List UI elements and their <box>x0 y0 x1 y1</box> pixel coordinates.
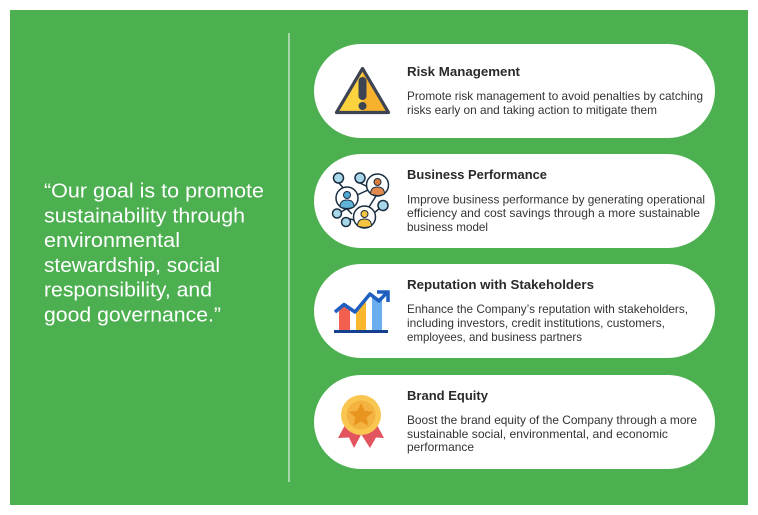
text: risk management description: Promote risk management to avoid penalties by catching <box>407 90 703 103</box>
heading: brand equity: Brand Equity <box>407 388 489 403</box>
icon: warning triangle <box>336 68 388 112</box>
text: business performance description: Improve business performance by generating operational <box>407 194 705 206</box>
heading: business performance: Business Performance <box>407 167 547 182</box>
quote text: sustainability through <box>44 205 245 227</box>
text: reputation description <box>407 303 688 344</box>
quote text: environmental <box>44 230 180 252</box>
text: business performance description <box>407 194 705 234</box>
heading: risk management: Risk Management <box>407 64 521 79</box>
icon: medal <box>338 395 384 448</box>
panel: reputation with stakeholders <box>314 264 715 358</box>
panel: business performance <box>314 154 715 248</box>
panel: risk management <box>314 44 715 138</box>
quote text: “Our goal is to promote <box>44 180 264 202</box>
icon: people network <box>332 173 388 228</box>
panel: brand equity <box>314 375 715 469</box>
quote text: good governance.” <box>44 304 221 326</box>
text: business performance description: business model <box>407 221 488 234</box>
text: brand equity description: Boost the brand equity of the Company through a more <box>407 414 697 427</box>
text: reputation description: employees, and business partners <box>407 331 582 344</box>
text: risk management description: risks early on and taking action to mitigate them <box>407 104 657 117</box>
text: risk management description <box>407 90 703 117</box>
text: reputation description: including investors, credit institutions, customers, <box>407 317 665 330</box>
text: reputation description: Enhance the Company’s reputation with stakeholders, <box>407 303 688 316</box>
heading: reputation with stakeholders: Reputation with Stakeholders <box>407 277 594 292</box>
icon: rising bar chart <box>334 292 388 333</box>
quote text: responsibility, and <box>44 280 212 302</box>
text: brand equity description: performance <box>407 441 474 454</box>
quote text: stewardship, social <box>44 255 220 277</box>
text: brand equity description <box>407 414 697 454</box>
text: business performance description: efficiency and cost savings through a more sustainable <box>407 207 700 220</box>
quote text <box>44 180 264 326</box>
text: brand equity description: sustainable social, environmental, and economic <box>407 428 668 441</box>
